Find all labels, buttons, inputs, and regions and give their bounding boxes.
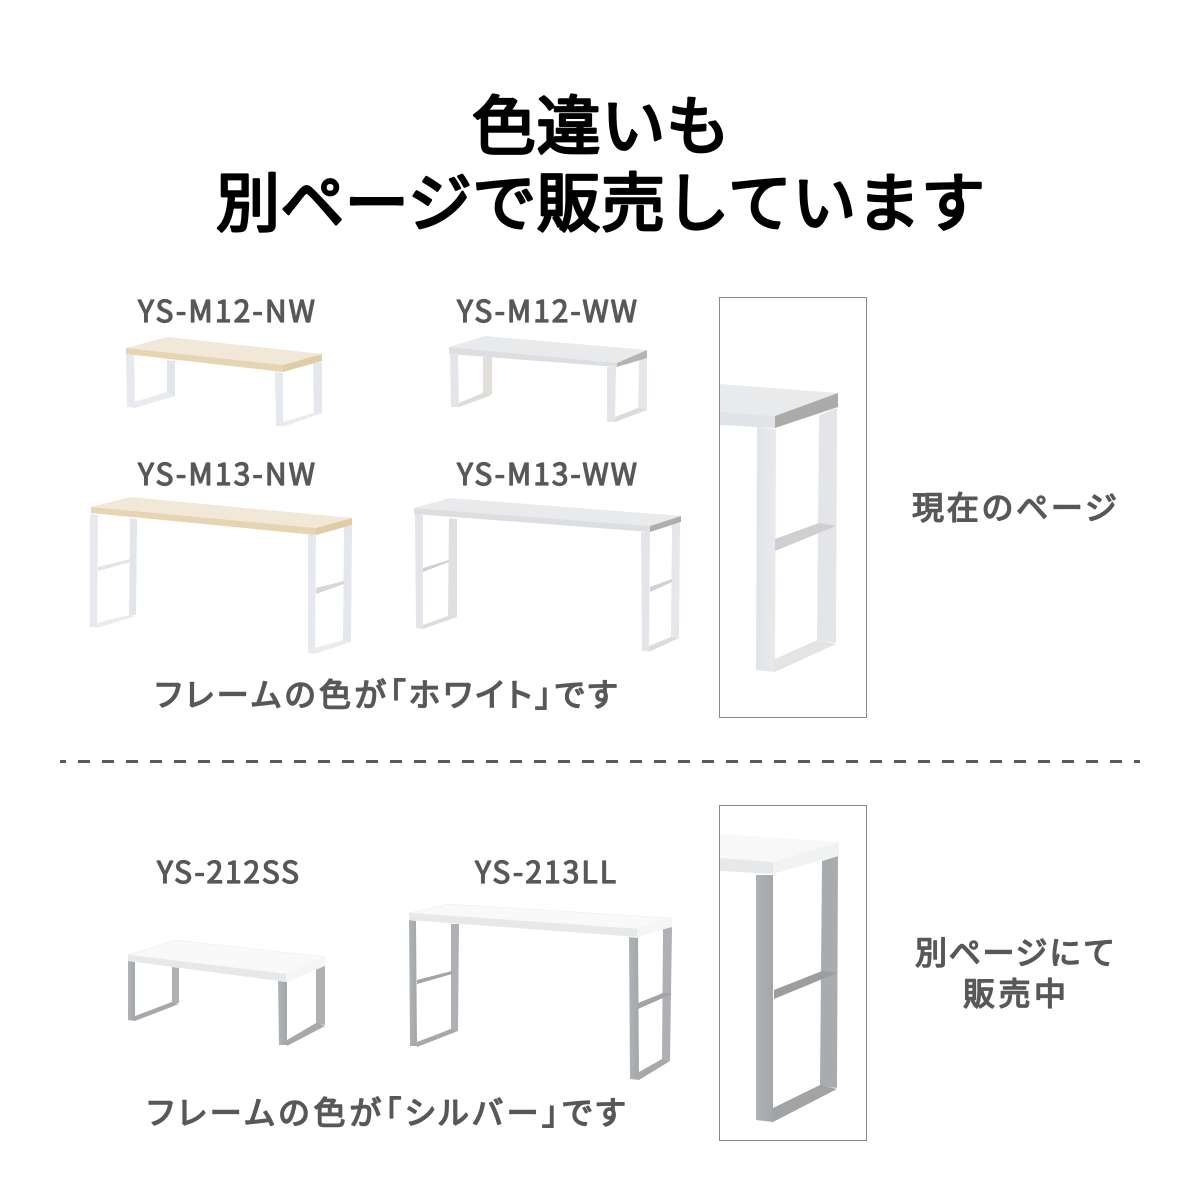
panel: white frame close-up bbox=[720, 298, 866, 718]
model label: YS-M12-NW: YS-M12-NW bbox=[137, 287, 315, 331]
dashed divider bbox=[60, 760, 1140, 763]
side label: current page: 現在のページ bbox=[912, 483, 1117, 529]
title bbox=[216, 76, 985, 245]
model label: YS-212SS: YS-212SS bbox=[156, 848, 299, 892]
close-up table leg: white frame bbox=[720, 384, 838, 672]
close-up table leg: silver frame bbox=[720, 834, 839, 1122]
side label: sold on another page: 販売中 bbox=[963, 969, 1066, 1015]
model label: YS-M13-NW: YS-M13-NW bbox=[137, 450, 315, 494]
model label: YS-M13-WW: YS-M13-WW bbox=[456, 450, 637, 494]
table: YS-212SS white top, silver frame bbox=[128, 940, 325, 1046]
title: 色違いも bbox=[472, 76, 730, 168]
table: YS-M13-WW white top, white frame bbox=[414, 498, 681, 652]
table: YS-213LL white top, silver frame bbox=[409, 904, 672, 1080]
table: YS-M12-NW natural top, white frame bbox=[126, 337, 322, 427]
side label: sold on another page bbox=[915, 928, 1115, 1015]
caption: silver frame: フレームの色が「シルバー」です bbox=[147, 1088, 625, 1134]
model label: YS-M12-WW: YS-M12-WW bbox=[456, 287, 637, 331]
panel: silver frame close-up bbox=[720, 806, 866, 1140]
side label: sold on another page: 別ページにて bbox=[915, 928, 1115, 974]
title: 別ページで販売しています bbox=[216, 153, 985, 245]
table: YS-M12-WW white top, white frame bbox=[449, 336, 647, 422]
table: YS-M13-NW natural top, white frame bbox=[90, 497, 352, 654]
caption: white frame: フレームの色が「ホワイト」です bbox=[155, 670, 617, 716]
model label: YS-213LL: YS-213LL bbox=[474, 848, 616, 892]
